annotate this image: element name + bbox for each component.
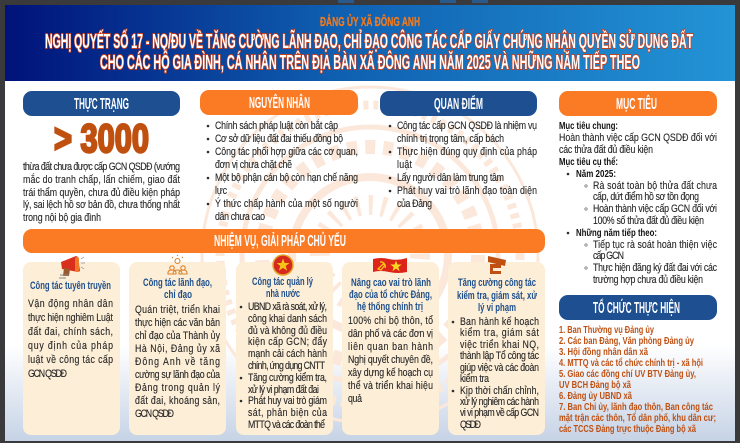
- card text: đủ và không đủ điều: [248, 325, 327, 337]
- icon: flags: [373, 258, 407, 273]
- causes list: Công tác phối hợp giữa các cơ quan,: [215, 146, 358, 158]
- card title: nhà nước: [266, 288, 300, 300]
- card text: kiểm tra, giám sát: [460, 327, 539, 339]
- heading: nguyên nhân: NGUYÊN NHÂN: [249, 93, 310, 112]
- card text: Quán triệt, triển khai: [135, 304, 220, 316]
- card text: [28, 298, 113, 380]
- heading: quan điểm: QUAN ĐIỂM: [434, 94, 483, 113]
- card text: sát, phản biện của: [248, 407, 327, 419]
- objectives text: Mục tiêu chung:: [559, 120, 618, 132]
- heading: thực trạng: [23, 91, 180, 116]
- status text: trái thẩm quyền, chưa đủ điều kiện pháp: [23, 187, 180, 199]
- organisation name: ĐẢNG ỦY XÃ ĐÔNG ANH: [320, 14, 420, 29]
- icon: national emblem: [273, 255, 293, 275]
- card text: chỉ đạo của Thành ủy: [135, 330, 220, 342]
- watermark emblem: [202, 87, 538, 423]
- objectives text: Mục tiêu cụ thể:: [559, 156, 618, 168]
- objectives text: Năm 2025:: [576, 168, 616, 180]
- card text: xử lý nghiêm các hành: [460, 396, 539, 408]
- card text: công khai danh sách: [248, 313, 327, 325]
- heading: quan điểm: [380, 91, 537, 116]
- status text: thừa đất chưa được cấp GCN QSDĐ (vướng: [23, 161, 180, 173]
- card text: vi vi phạm về cấp GCN: [460, 407, 539, 419]
- card text: việc triển khai NQ,: [460, 339, 539, 351]
- implementation list: 3. Hội đồng nhân dân xã: [559, 346, 648, 358]
- viewpoints list: Công tác cấp GCN QSDĐ là nhiệm vụ: [397, 120, 537, 132]
- header banner: [5, 5, 735, 81]
- card title: chỉ đạo: [164, 289, 192, 301]
- card text: luật về công tác cấp: [28, 354, 113, 366]
- objectives text: các thửa đất đủ điều kiện: [559, 144, 653, 156]
- objectives text: Tiếp tục rà soát hoàn thiện việc: [593, 239, 717, 251]
- card: công tác quản lý nhà nước: [236, 255, 333, 435]
- implementation list: 2. Các ban Đảng, Văn phòng Đảng ủy: [559, 335, 694, 347]
- panel: quan điểm: [380, 91, 537, 210]
- implementation list: UV BCH Đảng bộ xã: [559, 379, 631, 391]
- objectives text: Hoàn thành việc cấp GCN đối với: [593, 203, 717, 215]
- card title: [252, 276, 314, 300]
- viewpoints list: của Đảng: [397, 198, 432, 210]
- panel: tổ chức thực hiện: [559, 295, 717, 435]
- heading: mục tiêu: [559, 91, 717, 116]
- card text: kiện cấp GCN; đẩy: [248, 336, 327, 348]
- viewpoints list: chính trị trọng tâm, cấp bách: [397, 133, 504, 145]
- viewpoints list: [389, 120, 537, 210]
- card text: Đông Anh về tăng: [135, 356, 220, 368]
- card text: [135, 304, 220, 420]
- viewpoints list: Lấy người dân làm trung tâm: [397, 172, 504, 184]
- objectives text: cấp, dứt điểm hồ sơ tồn đọng: [593, 191, 699, 203]
- card text: xây dựng kế hoạch cụ: [348, 367, 433, 379]
- icon: people: [168, 255, 187, 274]
- card text: mạnh cải cách hành: [248, 348, 327, 360]
- heading: mục tiêu: MỤC TIÊU: [616, 94, 657, 113]
- card text: [348, 315, 433, 405]
- card text: Kịp thời chấn chỉnh,: [460, 385, 539, 397]
- card text: Đảng trong quản lý: [135, 382, 220, 394]
- viewpoints list: Phát huy vai trò lãnh đạo toàn diện: [397, 185, 537, 197]
- card text: thể và triển khai hiệu: [348, 380, 433, 392]
- card text: quy định của pháp: [28, 340, 113, 352]
- objectives text: trường hợp chưa đủ điều kiện: [593, 274, 703, 286]
- panel: nguyên nhân: [200, 90, 358, 223]
- card title: [349, 277, 432, 313]
- objectives text: 100% số thửa đất đủ điều kiện: [593, 215, 704, 227]
- card text: kiểm tra: [460, 373, 489, 385]
- card text: liên quan ban hành: [348, 341, 433, 353]
- card text: [452, 316, 539, 431]
- objectives text: Thực hiện đăng ký đất đai với các: [593, 262, 717, 274]
- card title: Nâng cao vai trò lãnh: [351, 277, 431, 289]
- viewpoints list: Thực hiện đúng quy định của pháp: [397, 146, 537, 158]
- main title: [45, 29, 693, 74]
- card text: Vận động nhân dân: [28, 298, 113, 310]
- card text: GCN QSDĐ: [135, 408, 174, 420]
- implementation list: 6. Đảng ủy UBND xã: [559, 390, 632, 402]
- heading: thực trạng: THỰC TRẠNG: [74, 96, 129, 113]
- status text: mắc do tranh chấp, lấn chiếm, giao đất: [23, 174, 180, 186]
- card text: thực hiện các văn bản: [135, 317, 220, 329]
- card title: lý vi phạm: [478, 302, 516, 314]
- panel: mục tiêu: [559, 91, 717, 286]
- card: công tác tuyên truyền: [23, 256, 120, 435]
- card text: Tăng cường kiểm tra,: [248, 372, 327, 384]
- causes list: dân chưa cao: [215, 211, 265, 223]
- causes list: đơn vị chưa chặt chẽ: [215, 159, 292, 171]
- icon: megaphone: [59, 256, 85, 278]
- card text: thành lập Tổ công tác: [460, 350, 539, 362]
- objectives text: [559, 120, 717, 286]
- card text: 100% chi bộ thôn, tổ: [348, 315, 433, 327]
- card: tăng cường kiểm tra: [448, 256, 545, 435]
- card text: cường sự lãnh đạo của: [135, 369, 220, 381]
- heading: nhiệm vụ, giải pháp: NHIỆM VỤ, GIẢI PHÁP CHỦ YẾU: [214, 231, 346, 250]
- status text: [23, 161, 180, 224]
- card title: đạo của tổ chức Đảng,: [349, 289, 432, 301]
- objectives text: Rà soát toàn bộ thửa đất chưa: [593, 180, 717, 192]
- card text: QSDĐ: [460, 419, 481, 431]
- card text: UBND xã rà soát, xử lý,: [248, 301, 327, 313]
- card: nâng cao vai trò lãnh đạo: [342, 258, 439, 435]
- card title: Công tác tuyên truyền: [30, 280, 111, 292]
- card text: xử lý vi phạm đất đai: [248, 384, 319, 396]
- card text: Nghị quyết chuyên đề,: [348, 354, 433, 366]
- viewpoints list: luật: [397, 159, 412, 171]
- heading: tổ chức thực hiện: [559, 295, 717, 320]
- card title: Công tác quản lý: [252, 276, 314, 288]
- big number: > 3000: [54, 117, 149, 161]
- card text: giúp việc và các đoàn: [460, 362, 539, 374]
- causes list: lực: [215, 185, 227, 197]
- card title: Tăng cường công tác: [458, 277, 536, 289]
- card text: MTTQ và các đoàn thể: [248, 419, 325, 431]
- card text: GCN QSDĐ: [28, 368, 67, 380]
- card text: thực hiện nghiêm Luật: [28, 312, 113, 324]
- card text: Hà Nội, Đảng ủy xã: [135, 343, 220, 355]
- card text: chính, ứng dụng CNTT: [248, 360, 325, 372]
- card title: hệ thống chính trị: [357, 301, 423, 313]
- status text: lý, sai lệch hồ sơ bản đồ, chưa thống nhất: [23, 199, 180, 211]
- icon: camera: [488, 256, 506, 274]
- causes list: Một bộ phận cán bộ còn hạn chế năng: [215, 172, 358, 184]
- card text: đất đai, chính sách,: [28, 326, 113, 338]
- card title: kiểm tra, giám sát, xử: [457, 290, 537, 302]
- implementation list: [559, 324, 716, 435]
- objectives text: Những năm tiếp theo:: [576, 227, 657, 239]
- objectives text: Hoàn thành việc cấp GCN QSDĐ đối với: [559, 132, 717, 144]
- card text: dân phố và các đơn vị: [348, 328, 433, 340]
- card text: [240, 301, 327, 431]
- card title: [143, 277, 212, 301]
- card title: [457, 277, 537, 314]
- implementation list: 1. Ban Thường vụ Đảng ủy: [559, 324, 654, 336]
- causes list: Ý thức chấp hành của một số người: [215, 198, 358, 210]
- card: công tác lãnh đạo: [129, 255, 226, 435]
- objectives text: cấp GCN: [593, 250, 624, 262]
- causes list: [207, 120, 358, 223]
- status text: trong nội bộ gia đình: [23, 212, 101, 224]
- heading: nguyên nhân: [200, 90, 358, 115]
- causes list: Chính sách pháp luật còn bắt cập: [215, 120, 338, 132]
- card text: Ban hành kế hoạch: [460, 316, 539, 328]
- heading: nhiệm vụ, giải pháp: [23, 229, 545, 253]
- card text: đất đai, khoáng sản,: [135, 395, 220, 407]
- card text: quả: [348, 393, 362, 405]
- card text: Phát huy vai trò giám: [248, 395, 327, 407]
- card title: Công tác lãnh đạo,: [143, 277, 212, 289]
- causes list: Cơ sở dữ liệu đất đai thiếu đồng bộ: [215, 133, 343, 145]
- panel: thực trạng: [23, 91, 180, 224]
